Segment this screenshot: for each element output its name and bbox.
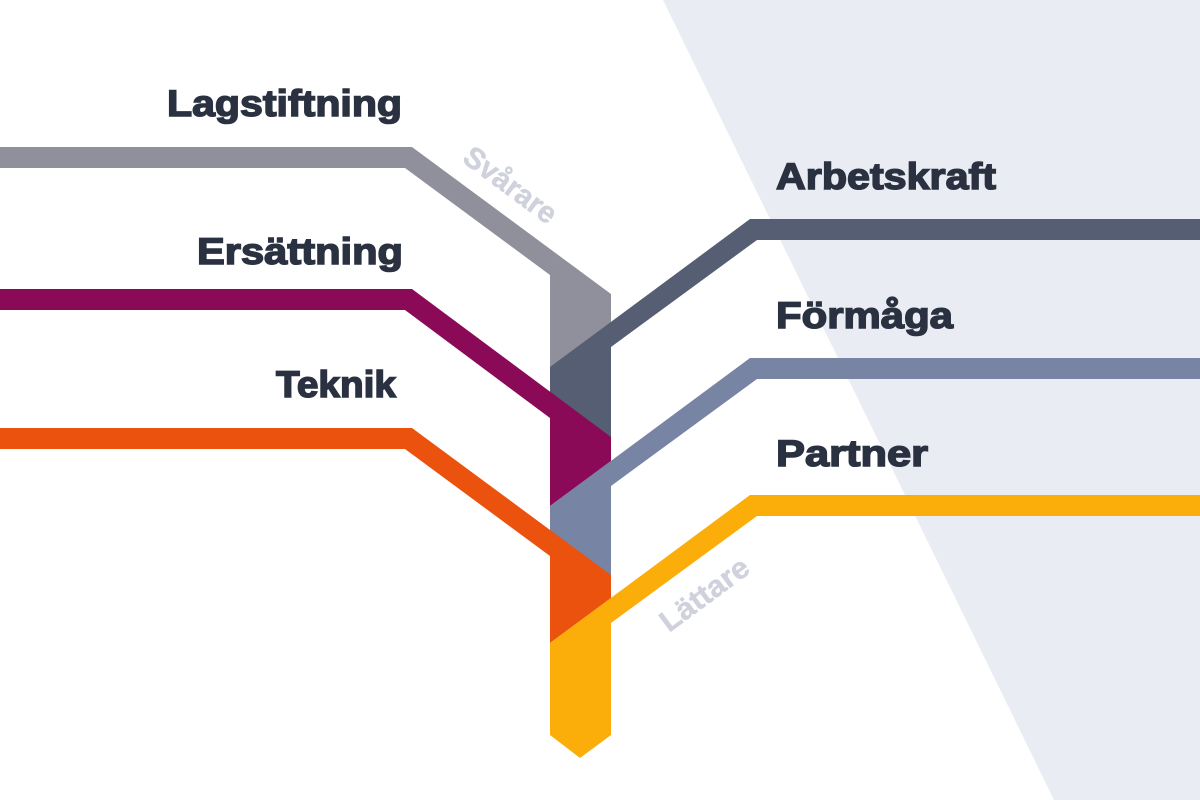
band: Lagstiftning: [0, 147, 611, 380]
background: pale diagonal panel: [663, 0, 1200, 800]
band: Arbetskraft: [550, 219, 1200, 445]
band: Förmåga: [550, 358, 1200, 585]
band: Teknik: [0, 428, 611, 643]
label: Ersättning: Ersättning: [197, 231, 403, 272]
label: Lagstiftning: Lagstiftning: [167, 83, 402, 124]
label: Teknik: Teknik: [276, 364, 396, 405]
label: Arbetskraft: Arbetskraft: [776, 156, 996, 197]
label: Förmåga: Förmåga: [776, 295, 953, 336]
label: Partner: Partner: [776, 433, 928, 474]
band: Ersättning: [0, 289, 611, 506]
annotation: Svårare: Svårare: [457, 140, 563, 231]
annotation: Lättare: Lättare: [654, 551, 756, 639]
band: Partner: [550, 495, 1200, 758]
